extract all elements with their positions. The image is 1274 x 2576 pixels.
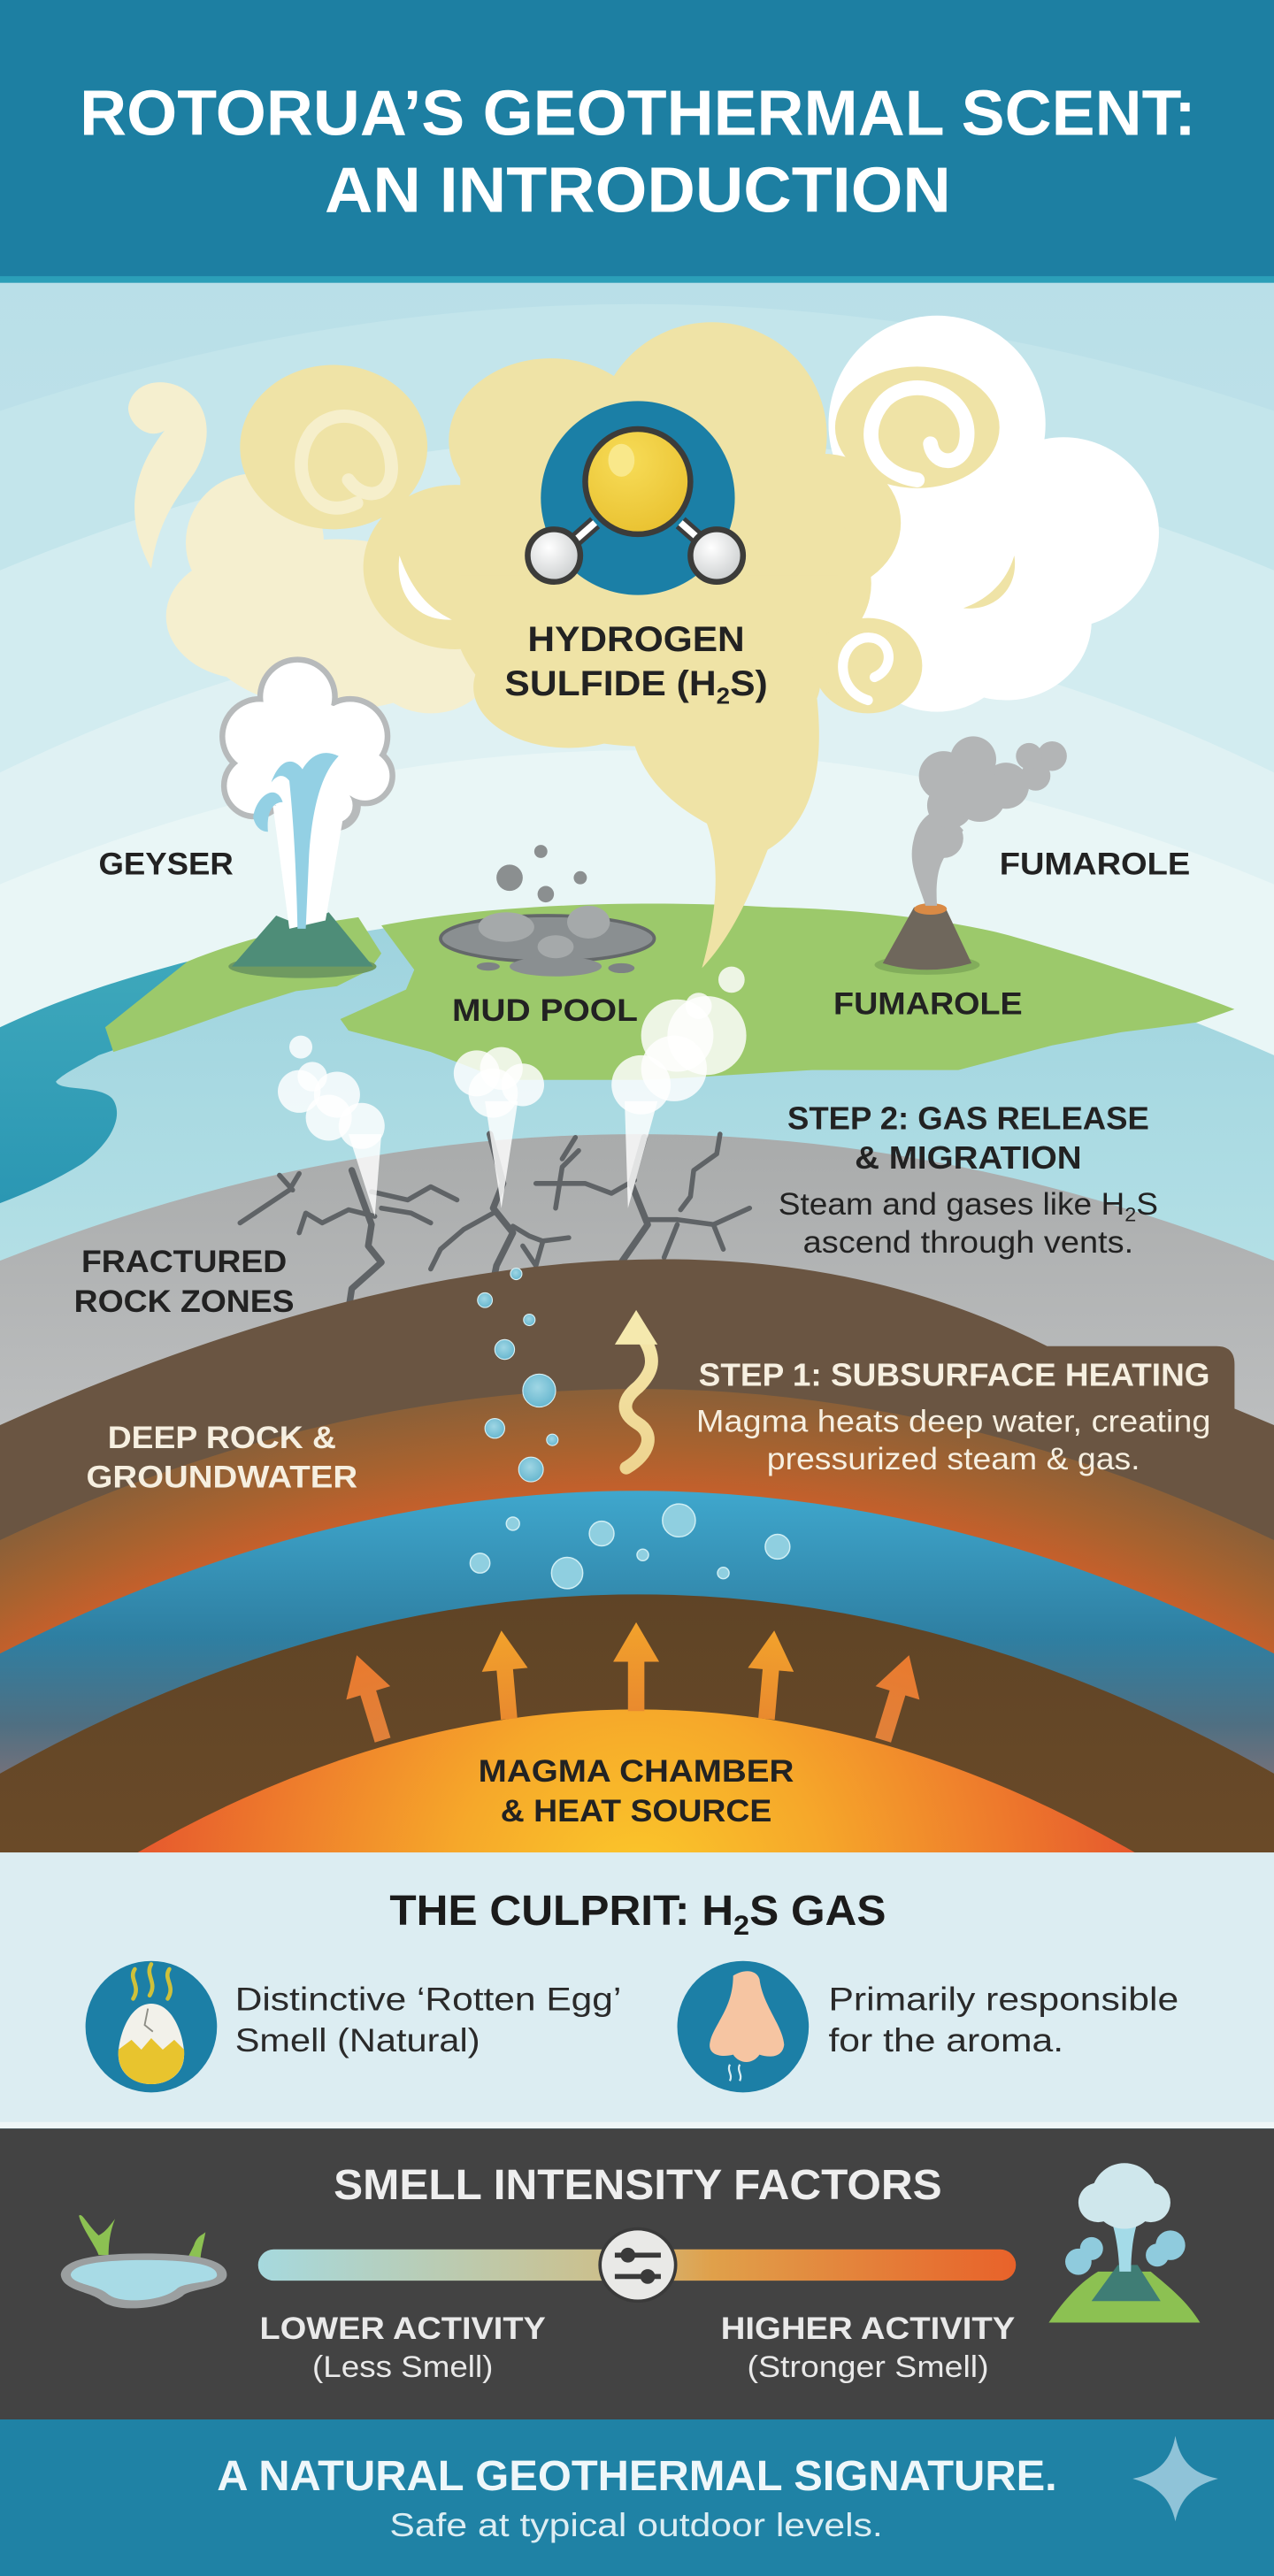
culprit heading: 2 <box>733 1909 749 1941</box>
heat arrows <box>334 1622 931 1747</box>
text: primarily responsible: for the aroma. <box>828 2021 1063 2058</box>
label: fractured rock zones: FRACTURED <box>81 1245 287 1279</box>
panel: footer <box>0 2419 1274 2576</box>
label: deep rock and groundwater: DEEP ROCK & <box>108 1421 336 1455</box>
grey fractured rock layer <box>0 1134 1274 1644</box>
label: higher activity: (Stronger Smell) <box>747 2350 989 2384</box>
text block: step 2: STEP 2: GAS RELEASE <box>787 1100 1149 1137</box>
label: hydrogen sulfide: 2 <box>717 682 730 709</box>
magma chamber <box>134 1709 1138 1854</box>
text block: step 2: & MIGRATION <box>855 1139 1082 1176</box>
text block: step 1: Magma heats deep water, creating <box>696 1404 1210 1438</box>
label: geyser: GEYSER <box>98 847 234 882</box>
culprit heading: S GAS <box>749 1887 886 1935</box>
footer note: Safe at typical outdoor levels. <box>389 2506 883 2543</box>
label: fumarole right: FUMAROLE <box>1000 847 1190 882</box>
brown deep rock layer with step tab <box>0 1259 1274 1775</box>
icon: rotten egg <box>86 1961 217 2092</box>
hot brown layer <box>0 1389 1274 1775</box>
icon: calm pond <box>61 2215 226 2308</box>
text block: step 2 <box>779 1100 1158 1260</box>
icon: active geyser <box>1048 2163 1200 2322</box>
label: higher activity <box>721 2312 1015 2384</box>
icon: geyser <box>224 661 391 978</box>
label: magma chamber: MAGMA CHAMBER <box>479 1754 794 1789</box>
text: rotten egg smell: Distinctive ‘Rotten Egg’ <box>235 1980 621 2017</box>
smoke plume <box>912 736 1067 906</box>
label: higher activity: HIGHER ACTIVITY <box>721 2312 1015 2346</box>
icon: nose <box>678 1961 809 2092</box>
culprit heading: THE CULPRIT: H <box>389 1887 725 1935</box>
cloud: pale wisp and cream cloud <box>128 382 496 713</box>
dark rock layer <box>0 1594 1274 1854</box>
text block: step 1 <box>696 1356 1210 1476</box>
text block: step 2: S <box>1136 1187 1158 1222</box>
heading: SMELL INTENSITY FACTORS <box>334 2161 942 2209</box>
text block: step 2: Steam and gases like H <box>779 1187 1158 1226</box>
slider bar <box>258 2229 1016 2301</box>
panel: sky background <box>0 283 1274 1315</box>
title: ROTORUA’S GEOTHERMAL SCENT: <box>80 77 1196 149</box>
panel: the culprit <box>0 1852 1274 2128</box>
label: lower activity: (Less Smell) <box>312 2350 493 2384</box>
label: lower activity: LOWER ACTIVITY <box>260 2312 546 2346</box>
label: magma chamber: & HEAT SOURCE <box>501 1794 771 1828</box>
slider knob <box>600 2229 676 2301</box>
cloud swirls <box>302 387 1015 701</box>
cloud: hydrogen sulfide plume <box>240 322 1000 968</box>
label: fumarole on land: FUMAROLE <box>833 986 1023 1021</box>
icon: H2S molecule <box>527 401 743 595</box>
label: hydrogen sulfide: SULFIDE (H <box>504 664 768 709</box>
title: AN INTRODUCTION <box>325 155 951 226</box>
icon: fumarole vent <box>874 736 1067 975</box>
text: rotten egg smell: Smell (Natural) <box>235 2021 480 2058</box>
mound <box>232 912 373 967</box>
dark teal water <box>0 962 188 1203</box>
footer headline: A NATURAL GEOTHERMAL SIGNATURE. <box>217 2452 1057 2500</box>
text block: step 2: ascend through vents. <box>803 1225 1133 1260</box>
land surface <box>105 903 1234 1080</box>
wavy rising heat arrow <box>615 1310 657 1468</box>
label: fractured rock zones: ROCK ZONES <box>74 1284 295 1319</box>
label: hydrogen sulfide: HYDROGEN <box>527 620 745 659</box>
icon: sparkle <box>1132 2436 1218 2521</box>
label: hydrogen sulfide: S) <box>730 664 768 703</box>
bubbles in rock <box>478 1269 558 1482</box>
earth surface water <box>0 909 1274 1315</box>
panel: smell intensity factors <box>0 2128 1274 2419</box>
groundwater layer <box>0 1491 1274 1854</box>
text block: step 1: pressurized steam & gas. <box>767 1442 1140 1476</box>
icon: mud pool <box>441 845 655 977</box>
rock cracks <box>240 1134 749 1310</box>
label: mud pool: MUD POOL <box>452 993 638 1028</box>
steam plumes rising from vents <box>278 967 747 1216</box>
bubbles in groundwater <box>470 1504 790 1589</box>
cloud: white steam <box>828 316 1159 712</box>
text: primarily responsible: Primarily responsible <box>828 1980 1178 2017</box>
text block: step 1: STEP 1: SUBSURFACE HEATING <box>699 1356 1210 1392</box>
text block: step 2: 2 <box>1124 1204 1136 1226</box>
label: deep rock and groundwater: GROUNDWATER <box>87 1460 357 1495</box>
header band <box>0 0 1274 283</box>
label: lower activity <box>260 2312 546 2384</box>
